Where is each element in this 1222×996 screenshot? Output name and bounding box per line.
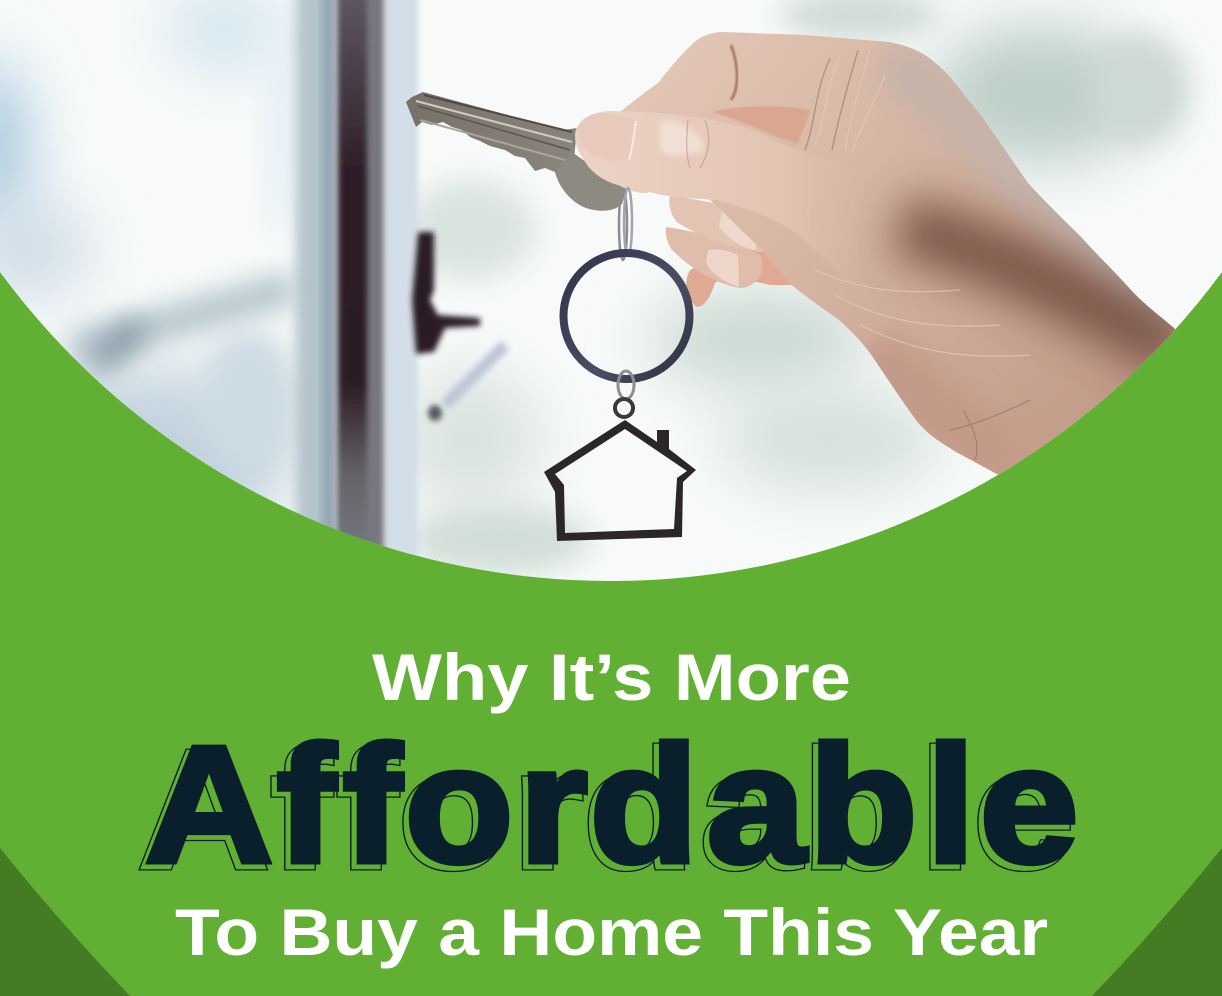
headline outline shadow: Affordable [139, 715, 1073, 903]
middle fingernail [719, 210, 756, 250]
thumb [575, 111, 809, 242]
nail edge highlight [629, 121, 636, 160]
house keychain [544, 420, 696, 541]
back finger [686, 250, 792, 307]
title line 1: Why It’s More [372, 640, 851, 714]
middle finger [669, 196, 764, 252]
gap between thumb and hand [712, 106, 810, 144]
headline Affordable [139, 710, 1079, 903]
dark green corner right [1092, 848, 1222, 996]
ring connector [615, 371, 634, 417]
split ring [619, 188, 632, 260]
dark green corner left [0, 848, 130, 996]
key blade [406, 92, 577, 172]
wrist top highlight [890, 55, 1170, 325]
thumbnail [577, 113, 637, 161]
lower finger [666, 227, 762, 288]
thumb highlights [660, 121, 705, 156]
lower palm tone [870, 350, 1010, 470]
hand [620, 32, 1176, 475]
blurred window background [0, 0, 1222, 600]
thumb wrinkle lines [687, 120, 709, 168]
door handle [412, 232, 505, 421]
window frame [296, 0, 418, 610]
headline outline shadow: Affordable [139, 715, 1073, 903]
wrist shadow band [900, 225, 1180, 350]
hand body [620, 32, 1176, 475]
title line 3: To Buy a Home This Year [175, 895, 1048, 969]
lower fingernail [706, 249, 739, 287]
key [406, 92, 628, 211]
headline main: Affordable [144, 710, 1079, 898]
title [139, 640, 1079, 969]
photo: hand holding key with house keychain [0, 0, 1222, 610]
key ring [564, 253, 690, 379]
crease wrinkles [815, 50, 1030, 356]
key groove lines [416, 101, 572, 142]
key head [555, 152, 628, 211]
thumb crease [731, 45, 737, 100]
